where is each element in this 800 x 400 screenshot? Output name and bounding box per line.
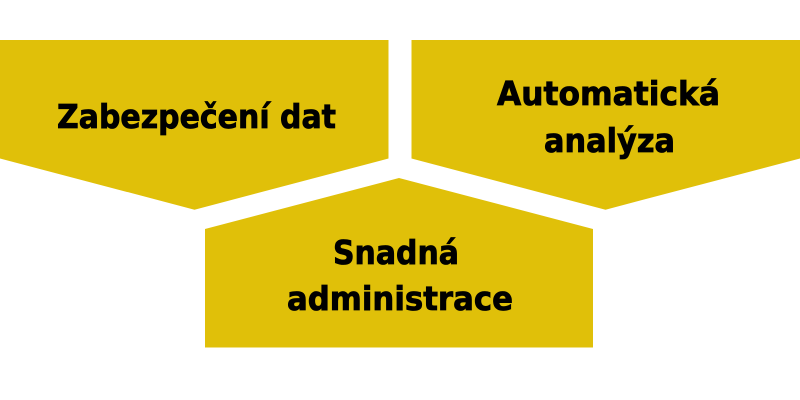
panel: automatic analysis bbox=[412, 40, 800, 210]
heading: Snadná administrace bbox=[287, 233, 513, 318]
heading: Automatická analýza bbox=[497, 74, 720, 160]
heading: Automatická analýza: analýza bbox=[544, 121, 675, 160]
heading: Snadná administrace: administrace bbox=[287, 279, 513, 318]
heading: Snadná administrace: Snadná bbox=[333, 233, 459, 272]
panel: data security bbox=[0, 40, 388, 210]
panel: easy administration bbox=[205, 178, 593, 348]
heading: Zabezpečení dat: Zabezpečení dat bbox=[57, 97, 336, 136]
heading: Automatická analýza: Automatická bbox=[497, 74, 720, 113]
